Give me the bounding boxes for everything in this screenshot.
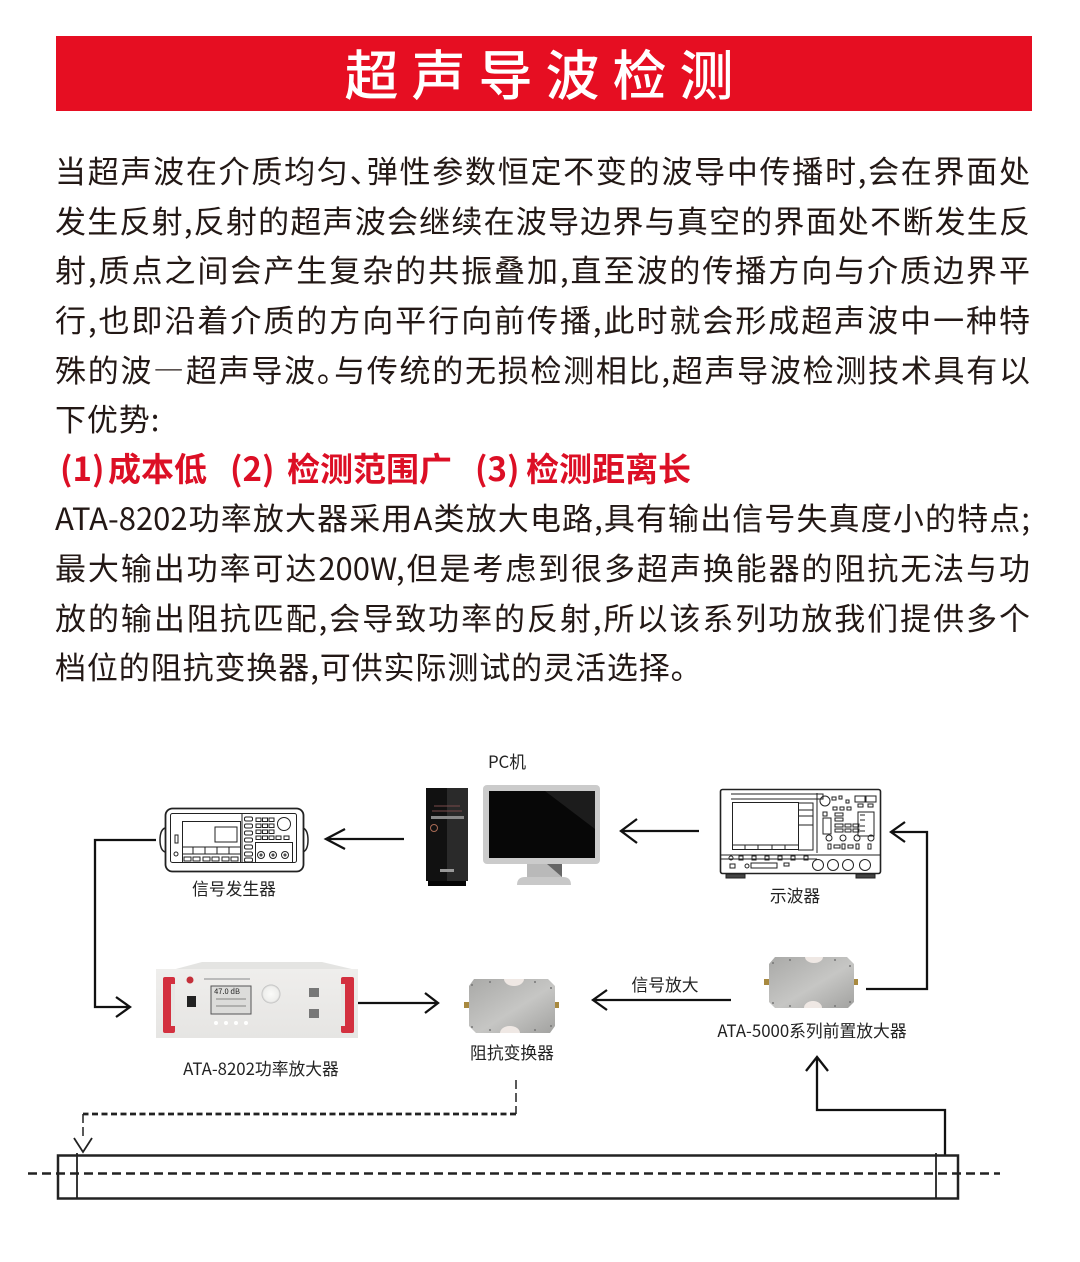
arrow: signal generator to power amplifier [95,840,156,1017]
text block: introduction: 档位的阻抗变换器,可供实际测试的灵活选择。 [55,643,686,688]
icon: ATA-8202 power amplifier: 47.0 dB [214,986,240,997]
text block: introduction: 殊的波—超声导波。与传统的无损检测相比,超声导波检测技术具有以 [55,346,1030,391]
arrow: receiving path [806,1057,945,1155]
arrow: preamplifier to oscilloscope [866,822,927,989]
label: impedance transformer: 阻抗变换器 [470,1040,554,1064]
arrow: preamplifier to impedance transformer [593,990,731,1010]
text block: introduction: 放的输出阻抗匹配,会导致功率的反射,所以该系列功放我们提供多个 [55,594,1030,639]
icon: PC tower [426,788,468,886]
waveguide tube [28,1153,1000,1199]
icon: signal generator [160,808,308,872]
label: power amplifier: ATA-8202功率放大器 [183,1056,339,1080]
text block: introduction: 下优势: [55,395,160,440]
title: 超声导波检测 [344,32,746,111]
text block: introduction: (3) [475,443,519,491]
text block: introduction: 检测距离长 [526,443,691,491]
title [56,36,1032,111]
label: PC: PC机 [488,749,526,773]
text block: introduction: 射,质点之间会产生复杂的共振叠加,直至波的传播方向与介质边界平 [55,246,1030,291]
label: signal amplification: 信号放大 [631,972,699,996]
icon: oscilloscope [720,790,880,878]
text block: introduction: 发生反射,反射的超声波会继续在波导边界与真空的界面处不断发生反 [55,197,1030,242]
text block: introduction: 最大输出功率可达200W,但是考虑到很多超声换能器的阻抗无法与功 [55,544,1030,589]
arrow: power amplifier to impedance transformer [358,993,438,1013]
arrow: PC to signal generator [326,829,404,849]
icon: monitor [483,785,600,885]
text block: introduction: ATA-8202功率放大器采用A类放大电路,具有输出信号失真度小的特点; [55,494,1030,539]
label: preamplifier: ATA-5000系列前置放大器 [717,1018,907,1042]
arrow: dashed excitation path [74,1080,516,1152]
text block: introduction: 成本低 [108,443,207,491]
text block: introduction: 检测范围广 [287,443,452,491]
label: signal generator: 信号发生器 [192,876,276,900]
text block: introduction [55,147,1030,688]
icon: ATA-5000 preamplifier [764,957,858,1008]
text block: introduction: (1) [60,443,104,491]
icon: ATA-8202 power amplifier [156,962,358,1038]
text block: introduction: 行,也即沿着介质的方向平行向前传播,此时就会形成超声波中一种特 [55,296,1030,341]
icon: impedance transformer [464,979,559,1033]
text block: introduction: 当超声波在介质均匀、弹性参数恒定不变的波导中传播时,会在界面处 [55,147,1030,192]
label: oscilloscope: 示波器 [770,883,820,907]
text block: introduction: (2) [230,443,274,491]
arrow: oscilloscope to PC [621,819,699,843]
